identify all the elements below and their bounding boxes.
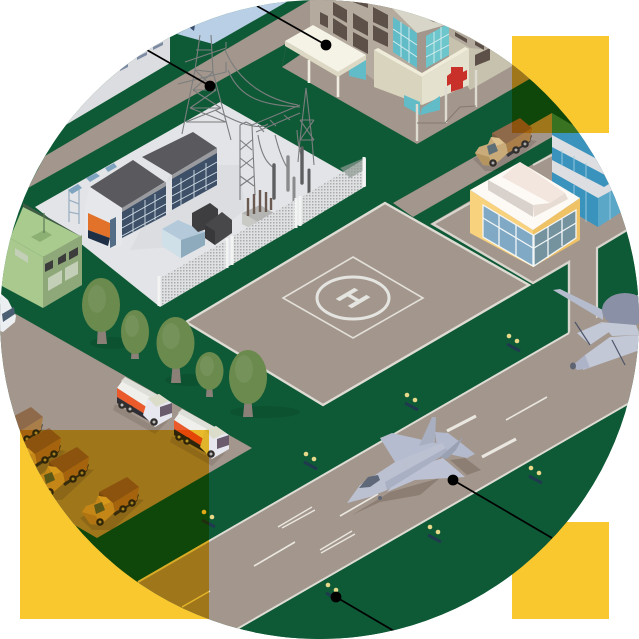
runway	[138, 296, 639, 629]
yellow glass building	[470, 162, 580, 267]
teal glass panels	[393, 17, 417, 68]
tanker trucks	[113, 377, 229, 466]
dark boxes	[192, 203, 232, 245]
landing circle	[317, 277, 389, 319]
green strip under runway	[237, 403, 639, 639]
hospital canopy	[285, 25, 366, 97]
AWACS radar planes	[553, 289, 639, 370]
callout line: pylon	[147, 50, 210, 86]
light blue transformer box	[162, 220, 205, 258]
yellow square: bottom left, outside portion	[20, 430, 209, 619]
callout dot: hospital	[321, 40, 331, 50]
teal entrance	[404, 95, 420, 115]
military trucks	[0, 407, 144, 530]
hospital	[310, 0, 515, 141]
pylons and wires	[178, 35, 314, 200]
front block	[374, 50, 422, 105]
blue office building	[552, 113, 620, 227]
building B glass hall	[142, 132, 217, 210]
grey building top left	[66, 37, 170, 125]
top edge	[392, 8, 444, 33]
hospital truck	[473, 118, 537, 171]
red cross	[447, 67, 467, 92]
plaza and right taxiway	[430, 141, 638, 332]
white van	[0, 293, 16, 332]
callout line: hospital	[257, 6, 326, 45]
green utility building	[0, 203, 82, 308]
fighter jet	[347, 417, 481, 515]
poles	[417, 70, 476, 141]
yellow square: bottom right, behind the circle	[512, 522, 609, 619]
lower left apron	[0, 305, 252, 538]
right wing	[449, 28, 512, 90]
left wall with windows	[310, 0, 417, 85]
yellow square: top right, outside portion	[512, 36, 609, 133]
callout line: runway lights	[336, 597, 394, 631]
landing square	[283, 257, 423, 338]
callout dot: pylon	[205, 81, 215, 91]
road to the truck	[393, 113, 552, 217]
callout dot: jet	[448, 475, 458, 485]
fence	[159, 157, 366, 306]
insulators	[274, 148, 309, 205]
callout dot: runway lights	[331, 592, 341, 602]
helipad	[186, 203, 529, 405]
callout line: jet	[453, 480, 552, 538]
hospital plaza	[282, 0, 540, 144]
runway lights	[202, 334, 542, 600]
substation platform	[35, 102, 366, 307]
green corner right	[597, 230, 639, 320]
runway markings	[182, 397, 547, 607]
green block and blue roof	[177, 0, 290, 44]
main transformer	[242, 190, 273, 227]
trees	[82, 278, 300, 418]
building A glass hall	[68, 160, 172, 249]
plaza border lines	[433, 203, 569, 334]
road upper left	[28, 0, 400, 188]
H letter: H	[328, 283, 378, 313]
